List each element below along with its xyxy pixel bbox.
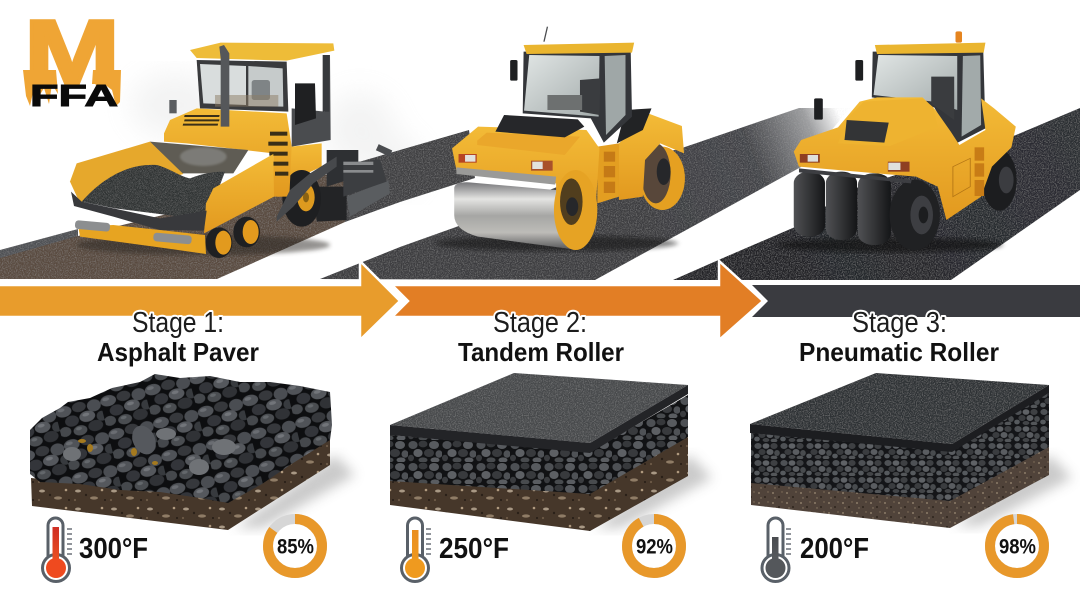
grille <box>844 120 889 143</box>
tyre guard bar <box>799 168 912 183</box>
body <box>794 97 1016 220</box>
logo: MFFA <box>23 2 121 113</box>
paver shadow <box>77 235 330 255</box>
block 2: top edge <box>390 385 688 453</box>
hopper right wall <box>204 154 274 233</box>
drum side plate <box>554 170 597 250</box>
road 3: pneumatic roller lane <box>673 108 1080 280</box>
side panel <box>597 143 619 203</box>
rear frame <box>619 113 684 200</box>
side hatch <box>953 158 970 197</box>
top deck <box>477 133 580 155</box>
roof <box>524 43 634 54</box>
seat <box>295 83 316 125</box>
hopper steam <box>180 147 227 166</box>
bumper rollers <box>75 220 192 244</box>
road 2: tandem roller lane <box>320 108 850 280</box>
heading: stage 3: Stage 3: <box>852 307 947 339</box>
steel drum <box>454 182 573 249</box>
front bumper <box>78 225 206 254</box>
panel: stage 1 <box>30 307 355 582</box>
block 3: top edge <box>750 385 1049 452</box>
logo drips <box>23 70 58 106</box>
panel: stage 3 <box>750 307 1072 582</box>
arrow: stage 1 <box>0 261 400 340</box>
arrow: stage 3 band <box>752 285 1080 317</box>
canopy rear post <box>323 55 329 112</box>
canopy <box>190 43 334 61</box>
rear drum <box>640 143 685 210</box>
donut: 92%: 92% <box>636 536 673 558</box>
block 3 shadow <box>955 455 1072 526</box>
front body <box>452 127 599 223</box>
temperature: 300F: 300°F <box>79 533 148 565</box>
roof <box>875 43 985 54</box>
heading: stage 1 <box>97 307 259 367</box>
block 1 shadow <box>235 455 355 528</box>
heading: stage 1: Asphalt Paver <box>97 337 259 367</box>
front light bar <box>456 154 556 185</box>
rear screed <box>313 144 392 222</box>
exhaust stack <box>219 45 229 127</box>
rear wheel <box>982 149 1017 211</box>
block 2: soil layer <box>390 435 688 531</box>
logo FFA letters: FFA <box>30 78 118 113</box>
panel: stage 2 <box>390 307 712 582</box>
block 3: top face <box>750 373 1049 444</box>
donut: 98%: 98% <box>999 536 1036 558</box>
road 1: fresh mat strip <box>345 130 475 222</box>
temperature: 250F: 250°F <box>439 533 509 565</box>
thermometer: 250F <box>402 518 431 582</box>
side mirror <box>169 100 177 113</box>
block 3: soil layer <box>751 447 1049 528</box>
asphalt pile <box>82 165 225 220</box>
tyre shadow <box>777 238 1003 252</box>
heading: stage 2: Tandem Roller <box>458 337 624 367</box>
donut: 92% <box>627 519 681 573</box>
mirrors <box>814 60 863 120</box>
engine hood dark <box>495 115 584 137</box>
heading: stage 2: Stage 2: <box>493 307 587 339</box>
logo M letter: M <box>24 2 120 104</box>
rear wheel <box>282 170 321 227</box>
side ladder <box>975 147 984 196</box>
cab <box>523 51 632 143</box>
hip panel <box>617 108 652 143</box>
thermometer: 200F <box>762 518 791 582</box>
machine: tandem roller <box>435 27 685 251</box>
thermometer: 300F <box>42 518 72 582</box>
mirror <box>510 60 518 81</box>
roller shadow <box>435 235 678 251</box>
engine hood <box>164 108 292 197</box>
logo right drip <box>92 70 121 106</box>
machine: pneumatic roller <box>777 31 1017 252</box>
front wheels <box>206 217 260 258</box>
hood panel <box>838 98 938 146</box>
hood vents <box>183 115 288 176</box>
rear body <box>277 143 322 197</box>
heading: stage 2 <box>458 307 624 367</box>
donut: 85% <box>268 519 322 573</box>
donut: 98% <box>990 519 1044 573</box>
block 1: highlighted stones <box>63 422 236 475</box>
block 1: bitumen glints <box>78 439 158 465</box>
block 2: top face <box>390 373 688 443</box>
arrow: stage 2 <box>392 261 763 340</box>
hopper left wall <box>70 142 183 203</box>
heading: stage 1: Stage 1: <box>132 307 224 339</box>
heading: stage 3 <box>799 307 999 367</box>
large front tyre <box>890 180 940 250</box>
scene: roads behind machines <box>0 73 1080 280</box>
machine: asphalt paver <box>70 43 392 258</box>
front tyres <box>794 172 891 245</box>
block 2: aggregate layer <box>390 395 688 494</box>
block 2 shadow <box>595 455 712 528</box>
head lights <box>800 154 910 172</box>
hopper interior <box>133 142 248 173</box>
block 3: aggregate layer <box>751 393 1049 501</box>
chassis arm <box>277 157 337 222</box>
hopper front lip <box>71 192 207 231</box>
temperature: 200F: 200°F <box>800 533 869 565</box>
smoke haze behind paver <box>130 73 422 193</box>
cab window <box>197 60 288 112</box>
donut: 85%: 85% <box>277 536 314 558</box>
heading: stage 3: Pneumatic Roller <box>799 337 999 367</box>
road 1: gravel base <box>0 170 345 279</box>
block 1: soil layer <box>31 437 330 530</box>
antenna <box>544 27 547 42</box>
block 1: loose aggregate top <box>30 374 332 503</box>
beacon <box>956 31 962 43</box>
side frame <box>292 55 331 147</box>
cab <box>872 51 985 144</box>
